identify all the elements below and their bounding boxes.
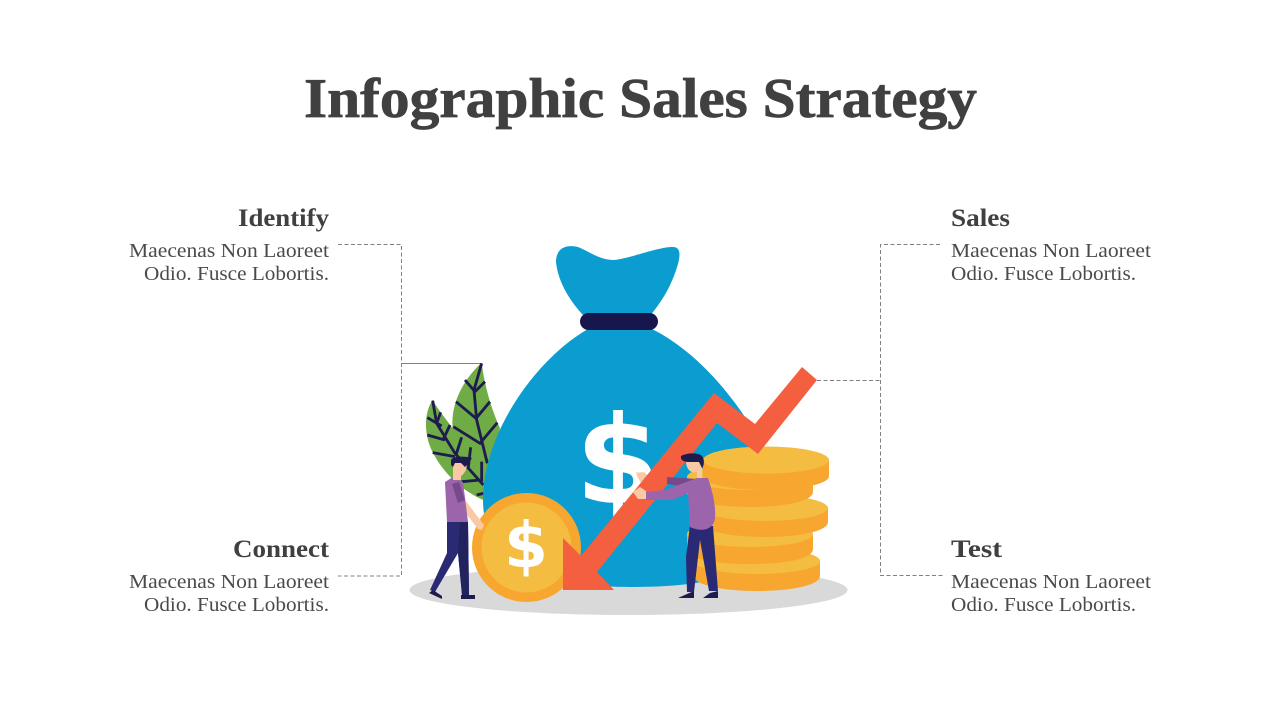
text block: Test: Test bbox=[951, 536, 1003, 563]
text block: Sales: Maecenas Non Laoreet bbox=[951, 240, 1151, 262]
text block: Identify bbox=[129, 205, 330, 285]
text block: Identify: Odio. Fusce Lobortis. bbox=[144, 263, 329, 285]
icon: money bag bbox=[483, 246, 790, 587]
icon: coin stack bbox=[687, 446, 829, 591]
figure: man pushing arrow bbox=[633, 453, 718, 598]
title: Infographic Sales Strategy bbox=[304, 68, 977, 130]
icon: money bag: $ bbox=[576, 390, 660, 532]
icon: dollar coin: $ bbox=[504, 509, 548, 582]
arrow: rear hand bbox=[636, 472, 650, 486]
text block: Identify: Identify bbox=[238, 205, 330, 232]
text block: Test bbox=[951, 536, 1151, 616]
text block: Sales bbox=[951, 205, 1151, 285]
text block: Test: Odio. Fusce Lobortis. bbox=[951, 594, 1136, 616]
text block: Connect: Odio. Fusce Lobortis. bbox=[144, 594, 329, 616]
text block: Identify: Maecenas Non Laoreet bbox=[129, 240, 329, 262]
arrow: zigzag down then up bbox=[563, 367, 817, 590]
icon: dollar coin bbox=[472, 493, 581, 602]
text block: Connect: Maecenas Non Laoreet bbox=[129, 571, 329, 593]
ground shadow bbox=[410, 565, 848, 615]
text block: Test: Maecenas Non Laoreet bbox=[951, 571, 1151, 593]
text block: Connect: Connect bbox=[233, 536, 330, 563]
text block: Sales: Sales bbox=[951, 205, 1010, 232]
text block: Connect bbox=[129, 536, 330, 616]
figure: man pushing coin bbox=[429, 457, 484, 599]
connector: right bracket bbox=[817, 244, 943, 576]
icon: leaves bbox=[426, 363, 500, 500]
text block: Sales: Odio. Fusce Lobortis. bbox=[951, 263, 1136, 285]
connector: left bracket bbox=[338, 244, 481, 576]
